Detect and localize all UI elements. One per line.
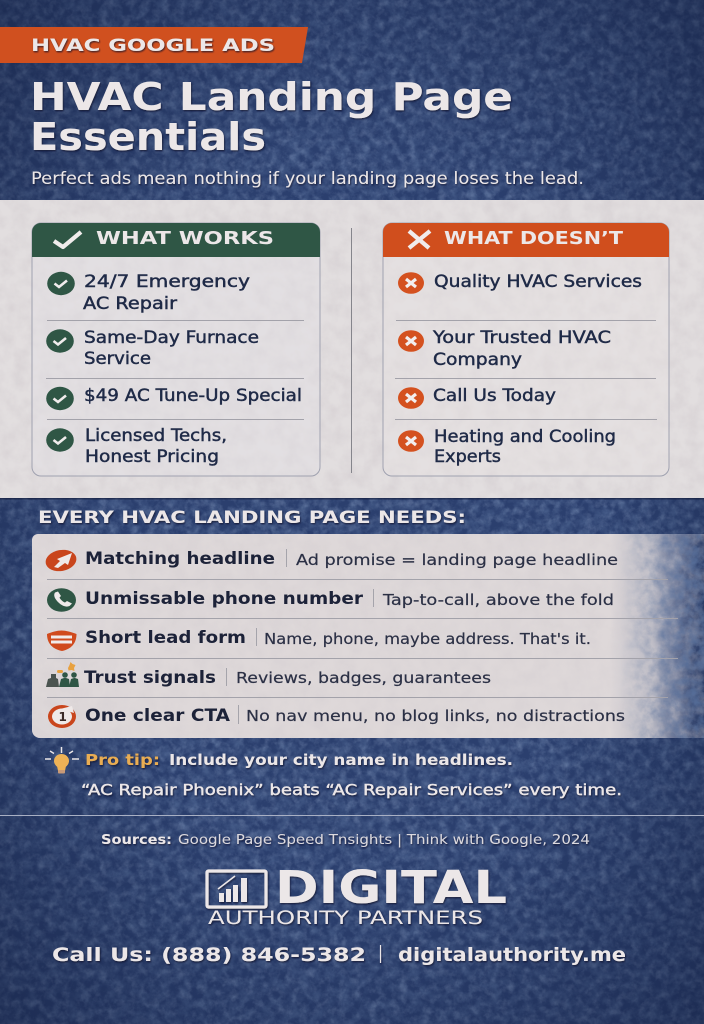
item: your trusted hvac company [398, 328, 611, 369]
icon: number one badge [48, 705, 76, 728]
item: your trusted hvac company: Your Trusted HVAC [432, 328, 611, 347]
item: licensed techs: Honest Pricing [85, 447, 219, 466]
panel: what doesn't [383, 223, 669, 476]
item: same-day furnace: Service [84, 349, 151, 368]
title: HVAC Landing Page [30, 75, 513, 119]
icon: chart box [207, 871, 266, 907]
icon: arrow badge [44, 547, 78, 574]
title [30, 75, 513, 159]
section heading: EVERY HVAC LANDING PAGE NEEDS: [38, 508, 466, 527]
row: one clear cta [48, 705, 625, 728]
sources: Sources: [101, 833, 172, 848]
row: short lead form [47, 628, 591, 651]
light comparison band [0, 200, 704, 500]
row: one clear cta: One clear CTA [85, 706, 231, 726]
panel: what works [32, 223, 320, 476]
category banner: HVAC GOOGLE ADS [31, 36, 275, 55]
item: heating and cooling experts [398, 427, 616, 466]
row: unmissable phone number [47, 588, 614, 612]
pro tip [45, 747, 622, 799]
panel: landing page needs [32, 534, 704, 738]
item: licensed techs: Licensed Techs, [85, 426, 227, 445]
pro tip: Pro tip: [85, 751, 160, 769]
header: what doesn't [383, 223, 669, 257]
item: same-day furnace: Same-Day Furnace [84, 328, 259, 347]
category banner [0, 27, 308, 63]
row: unmissable phone number: Tap-to-call, above the fold [382, 591, 614, 609]
item: 24/7 emergency: 24/7 Emergency [84, 272, 250, 291]
pro tip: “AC Repair Phoenix” beats “AC Repair Services” every time. [81, 781, 622, 799]
item: your trusted hvac company: Company [433, 350, 522, 369]
row: matching headline: Ad promise = landing page headline [296, 551, 618, 569]
item: quality hvac services [398, 272, 642, 294]
item: tune-up special: $49 AC Tune-Up Special [84, 386, 302, 405]
row: matching headline [44, 547, 618, 574]
contact line: digitalauthority.me [398, 944, 626, 966]
item: tune-up special [46, 386, 302, 410]
item: heating and cooling experts: Heating and Cooling [434, 427, 616, 446]
logo: AUTHORITY PARTNERS [208, 908, 483, 929]
item: 24/7 emergency [47, 272, 250, 313]
logo [207, 861, 507, 929]
header: what works: WHAT WORKS [96, 229, 274, 249]
item: 24/7 emergency: AC Repair [83, 294, 177, 313]
item: quality hvac services: Quality HVAC Services [434, 272, 642, 291]
contact line [52, 944, 626, 966]
pro tip: Include your city name in headlines. [169, 751, 513, 769]
item: call us today [398, 386, 556, 409]
icon: form shield [47, 630, 76, 651]
contact line: Call Us: (888) 846-5382 [52, 944, 366, 966]
item: heating and cooling experts: Experts [434, 447, 501, 466]
row: trust signals: Reviews, badges, guarantees [236, 669, 491, 687]
icon: lightbulb [45, 747, 79, 774]
row: matching headline: Matching headline [85, 549, 275, 569]
title: Essentials [30, 115, 266, 159]
sources: Google Page Speed Tnsights | Think with Google, 2024 [178, 833, 590, 848]
header: what works [32, 223, 320, 257]
icon: phone [47, 588, 76, 612]
subtitle: Perfect ads mean nothing if your landing page loses the lead. [31, 169, 584, 189]
logo: DIGITAL [275, 861, 507, 914]
item: call us today: Call Us Today [433, 386, 556, 405]
row: short lead form: Short lead form [85, 628, 246, 648]
item: licensed techs [46, 426, 227, 466]
row: trust signals: Trust signals [84, 668, 216, 688]
icon: number one badge: 1 [58, 710, 67, 724]
row: one clear cta: No nav menu, no blog links, no distractions [246, 707, 625, 725]
row: unmissable phone number: Unmissable phone number [85, 589, 364, 609]
row: trust signals [46, 662, 491, 688]
icon: people and star [46, 662, 79, 687]
item: same-day furnace [46, 328, 259, 368]
header: what doesn't: WHAT DOESN’T [444, 229, 623, 249]
row: short lead form: Name, phone, maybe address. That's it. [264, 630, 591, 648]
